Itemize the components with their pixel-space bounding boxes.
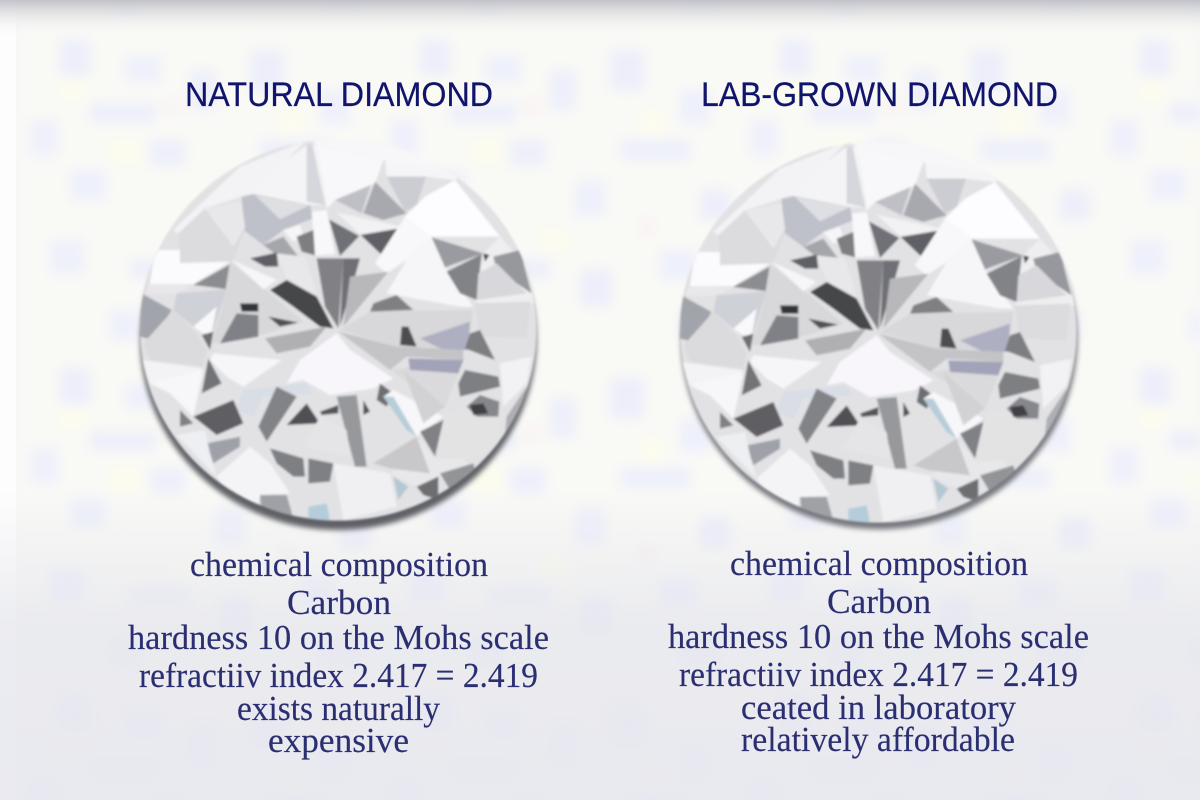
text block: natural properties: Carbon	[287, 583, 391, 622]
text block: natural properties: refractiiv index 2.417 = 2.419	[139, 656, 538, 695]
text block: natural properties: chemical composition	[190, 545, 488, 584]
text block: lab-grown properties: refractiiv index 2.417 = 2.419	[679, 655, 1078, 694]
panel: natural diamond	[128, 76, 550, 760]
text block: lab-grown properties: ceated in laboratory	[741, 688, 1016, 727]
diamond image: natural	[130, 130, 550, 540]
text block: lab-grown properties	[668, 544, 1089, 759]
text block: lab-grown properties: Carbon	[827, 582, 931, 621]
heading: lab-grown diamond: LAB-GROWN DIAMOND	[701, 76, 1058, 114]
text block: natural properties	[128, 545, 549, 760]
diamond image: lab-grown	[670, 132, 1090, 542]
text block: lab-grown properties: relatively affordable	[741, 720, 1015, 759]
panel: lab-grown diamond	[668, 76, 1090, 759]
text block: natural properties: hardness 10 on the Mohs scale	[128, 618, 549, 657]
text block: natural properties: exists naturally	[237, 689, 440, 728]
text block: natural properties: expensive	[268, 721, 409, 760]
text block: lab-grown properties: chemical composition	[730, 544, 1028, 583]
text block: lab-grown properties: hardness 10 on the Mohs scale	[668, 617, 1089, 656]
heading: natural diamond: NATURAL DIAMOND	[185, 76, 493, 114]
